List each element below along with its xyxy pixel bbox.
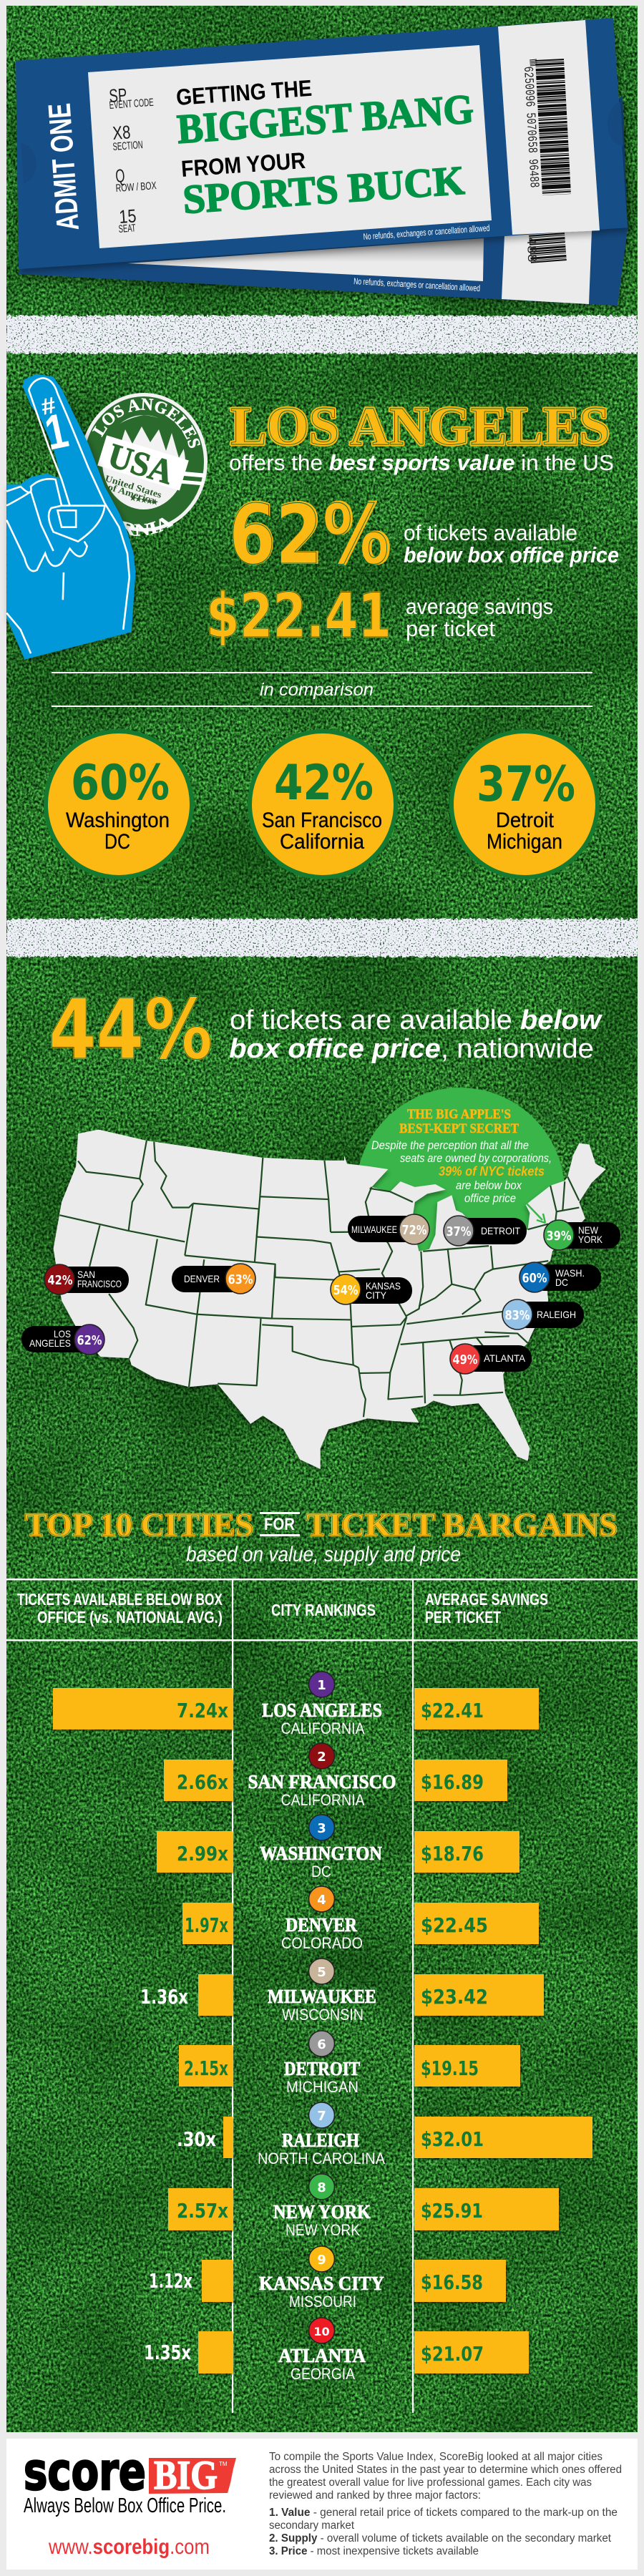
callout: Big Apple text: THE BIG APPLE'S (407, 1107, 511, 1122)
row 3: Washington (157, 1815, 519, 1880)
yard line two (6, 919, 638, 957)
heading: Los Angeles: LOS ANGELES (230, 396, 610, 457)
row 5: Milwaukee: WISCONSIN (282, 2006, 364, 2024)
ticket seat details: SEAT (118, 222, 136, 235)
row 10: Atlanta: GEORGIA (291, 2365, 355, 2383)
row 3: Washington: 2.99x (177, 1842, 228, 1865)
stat text: savings description (406, 594, 553, 641)
map pin: Detroit: 37% (447, 1224, 471, 1239)
callout: Big Apple text: office price (464, 1191, 516, 1205)
callout: Big Apple text (371, 1107, 552, 1205)
row 6: Detroit: 6 (317, 2037, 326, 2052)
barcode: 6250096 5070658 96488 (520, 66, 541, 188)
ticket seat details: Q (114, 165, 125, 187)
map pin: Raleigh (502, 1299, 584, 1330)
map pin: New York: NEW (578, 1224, 599, 1236)
back ticket: No refunds, exchanges or cancellation allowed (353, 276, 480, 293)
US map (54, 1129, 606, 1469)
ticket title: GETTING THE (175, 75, 313, 110)
row 1: Los Angeles: LOS ANGELES (262, 1699, 382, 1721)
stat text: 44 percent description: box office price , nationwide (229, 1034, 594, 1064)
row 7: Raleigh: $32.01 (421, 2127, 484, 2151)
map pin: San Francisco: SAN (77, 1269, 95, 1280)
ticket seat details: ROW / BOX (115, 180, 157, 195)
map pin: Atlanta: 49% (452, 1352, 478, 1367)
map pin: Washington DC: DC (555, 1277, 568, 1288)
row 5: Milwaukee: 5 (317, 1965, 326, 1980)
ticket seat details: EVENT CODE (109, 97, 154, 112)
in comparison label: in comparison (260, 680, 374, 700)
map pin: San Francisco: FRANCISCO (77, 1278, 122, 1289)
map pin: Denver: DENVER (184, 1273, 220, 1284)
map pin: Raleigh: 83% (505, 1308, 530, 1323)
row 8: New York (168, 2174, 559, 2239)
callout: Big Apple text: Despite the perception that all the (371, 1138, 529, 1152)
methodology text (269, 2451, 622, 2557)
map pin: Los Angeles: ANGELES (29, 1337, 71, 1349)
row 7: Raleigh: 7 (317, 2109, 326, 2124)
ScoreBig logo: BIG (154, 2453, 218, 2498)
row 8: New York: 8 (317, 2180, 326, 2195)
row 9: Kansas City: 9 (317, 2253, 326, 2268)
ticket title (175, 75, 475, 223)
heading: Top 10 Cities for Ticket Bargains: TOP 10 CITIES (25, 1506, 253, 1543)
row 4: Denver: $22.45 (421, 1913, 488, 1937)
callout: Big Apple text: seats are owned by corporations, (400, 1151, 552, 1165)
stamp: Los Angeles California (84, 393, 208, 536)
map pin: Denver (172, 1264, 255, 1294)
ticket seat details: SECTION (112, 139, 143, 153)
comparison circle: Washington DC (46, 731, 192, 877)
ticket seat details: X8 (112, 121, 131, 144)
heading: Top 10 Cities for Ticket Bargains (25, 1506, 618, 1543)
comparison circle: San Francisco California: San Francisco (262, 809, 382, 832)
methodology text: the greatest overall value for live professional games. Each city was (269, 2477, 592, 2489)
map pin: Milwaukee (348, 1214, 429, 1244)
map pin: Washington DC: WASH. (555, 1267, 585, 1279)
row 3: Washington: WASHINGTON (260, 1843, 382, 1864)
row 8: New York: NEW YORK (273, 2201, 371, 2223)
row 5: Milwaukee: MILWAUKEE (268, 1986, 376, 2007)
map pin: Atlanta: ATLANTA (484, 1352, 526, 1364)
row 10: Atlanta: 1.35x (144, 2341, 191, 2364)
methodology text: secondary market (269, 2519, 355, 2532)
stat: average savings amount: $22.41 (206, 580, 391, 652)
row 2: San Francisco: 2.66x (177, 1770, 228, 1794)
heading: Los Angeles: LOS ANGELES (230, 396, 610, 457)
comparison circle: Washington DC: DC (104, 830, 130, 854)
footer panel (6, 2439, 638, 2570)
row 9: Kansas City: 1.12x (149, 2269, 192, 2293)
subheading: based on value, supply and price: based on value, supply and price (186, 1543, 461, 1566)
row 4: Denver: COLORADO (281, 1934, 363, 1952)
back ticket (19, 95, 628, 306)
map pin: Detroit: DETROIT (481, 1225, 520, 1236)
map pin: Kansas City (331, 1274, 412, 1304)
number one on finger: # (39, 391, 58, 420)
row 6: Detroit: 2.15x (184, 2057, 228, 2080)
callout: Big Apple text: are below box (456, 1179, 522, 1192)
ScoreBig logo: score (24, 2441, 146, 2502)
comparison circle: Detroit Michigan: Detroit (496, 809, 555, 832)
stat: 62 percent: 62% (229, 487, 389, 582)
heading: Top 10 Cities for Ticket Bargains: TOP 10 CITIES (25, 1506, 253, 1543)
tagline: Always Below Box Office Price. (24, 2494, 226, 2517)
row 7: Raleigh: NORTH CAROLINA (258, 2150, 385, 2167)
number one on finger: 1 (40, 403, 72, 461)
heading: Top 10 Cities for Ticket Bargains: TICKET BARGAINS (306, 1506, 618, 1543)
stamp: Los Angeles California: LOS ANGELES (92, 398, 200, 448)
row 10: Atlanta: 10 (313, 2325, 330, 2338)
comparison circle: San Francisco California: 42% (274, 755, 374, 811)
stat: 44 percent nationwide: 44% (49, 982, 213, 1078)
map pin: Los Angeles (21, 1324, 104, 1355)
map pin: Milwaukee: MILWAUKEE (351, 1224, 397, 1235)
table header: average savings (425, 1590, 548, 1626)
stat text: 44 percent description: of tickets are available below (230, 1005, 603, 1035)
row 9: Kansas City (149, 2246, 506, 2311)
ticket title: SPORTS BUCK (182, 158, 466, 223)
row 9: Kansas City: MISSOURI (289, 2293, 356, 2311)
ticket seat details: SP (108, 84, 127, 107)
row 1: Los Angeles: 1 (317, 1678, 326, 1693)
methodology text: 1. Value - general retail price of tickets compared to the mark-up on the (269, 2507, 618, 2519)
map pin: Atlanta (450, 1344, 532, 1374)
stat text: savings description: average savings (406, 594, 553, 619)
map pin: Washington DC (519, 1262, 601, 1292)
map pin: New York: 39% (547, 1229, 571, 1244)
stat text: 62 percent description: of tickets available (404, 520, 577, 545)
methodology text: across the United States in the past year to determine which ones offered (269, 2464, 622, 2476)
row 5: Milwaukee: $23.42 (421, 1985, 488, 2009)
comparison circle: Washington DC: 60% (71, 755, 170, 811)
stamp: Los Angeles California: USA (104, 436, 178, 492)
table header: tickets available (17, 1590, 223, 1626)
row 1: Los Angeles: $22.41 (421, 1699, 484, 1722)
map pin: Los Angeles: LOS (54, 1328, 71, 1340)
stat text: 62 percent description (404, 520, 619, 567)
comparison circle: San Francisco California: California (280, 830, 364, 854)
row 5: Milwaukee (140, 1958, 544, 2024)
stat text: 62 percent description: below box office price (404, 542, 619, 567)
map pin: New York (544, 1220, 620, 1250)
subheading: best sports value: offers the best sports value in the US (229, 450, 614, 475)
row 6: Detroit: MICHIGAN (286, 2078, 358, 2096)
row 1: Los Angeles: CALIFORNIA (280, 1719, 365, 1737)
row 3: Washington: 3 (317, 1821, 326, 1836)
stamp: Los Angeles California: United States (104, 473, 163, 500)
callout background: Big Apple (356, 1088, 565, 1297)
map pin: Detroit (444, 1216, 527, 1246)
stamp: Los Angeles California: of America (107, 482, 157, 506)
row 6: Detroit (179, 2031, 520, 2096)
row 8: New York: NEW YORK (286, 2221, 360, 2239)
front ticket (16, 18, 628, 269)
map pin: Los Angeles: 62% (77, 1333, 102, 1348)
row 9: Kansas City: KANSAS CITY (259, 2273, 384, 2294)
methodology text: 2. Supply - overall volume of tickets available on the secondary market (269, 2532, 612, 2545)
map pin: New York: YORK (578, 1234, 603, 1245)
table header: city rankings: CITY RANKINGS (271, 1601, 376, 1619)
row 7: Raleigh: .30x (177, 2127, 216, 2151)
ticket fine print: No refunds, exchanges or cancellation allowed (363, 223, 490, 242)
map pin: Denver: 63% (228, 1272, 253, 1287)
stat: 62 percent: 62% (229, 487, 391, 583)
row 10: Atlanta: $21.07 (421, 2342, 484, 2366)
comparison circle: Detroit Michigan (452, 731, 597, 877)
callout: Big Apple text: BEST-KEPT SECRET (399, 1121, 519, 1136)
row 3: Washington: DC (311, 1863, 331, 1880)
callout: Big Apple text: 39% of NYC tickets (439, 1164, 545, 1179)
yard line one (6, 316, 638, 353)
table header: average savings: AVERAGE SAVINGS (425, 1590, 548, 1609)
row 4: Denver: DENVER (286, 1914, 357, 1936)
row 2: San Francisco: CALIFORNIA (280, 1791, 365, 1809)
row 1: Los Angeles (53, 1672, 539, 1737)
comparison circle: San Francisco California (250, 731, 396, 877)
row 4: Denver (182, 1886, 539, 1952)
row 8: New York: 2.57x (177, 2199, 228, 2223)
row 8: New York: $25.91 (421, 2199, 483, 2223)
methodology text: 3. Price - most inexpensive tickets available (269, 2545, 479, 2557)
row 2: San Francisco: SAN FRANCISCO (248, 1771, 396, 1792)
row 2: San Francisco: 2 (317, 1750, 326, 1765)
row 4: Denver: 1.97x (185, 1913, 228, 1937)
row 5: Milwaukee: 1.36x (140, 1985, 188, 2009)
row 10: Atlanta (144, 2318, 529, 2383)
stat text: savings description: per ticket (406, 616, 495, 641)
ticket seat details: 15 (118, 205, 137, 228)
row 9: Kansas City: $16.58 (421, 2270, 483, 2294)
table header: average savings: PER TICKET (425, 1608, 501, 1626)
row 1: Los Angeles: 7.24x (177, 1699, 228, 1722)
stamp: Los Angeles California: ★★★★★ (129, 494, 159, 507)
ScoreBig logo: TM (219, 2461, 228, 2467)
map pin: San Francisco (44, 1264, 129, 1294)
stamp: Los Angeles California: CALIFORNIA (123, 518, 173, 536)
foam finger icon (6, 374, 135, 660)
row 2: San Francisco (164, 1743, 507, 1809)
stat: 44 percent nationwide: 44% (49, 982, 213, 1078)
ticket title: BIGGEST BANG (175, 85, 475, 152)
comparison circle: Detroit Michigan: 37% (477, 756, 575, 813)
row 3: Washington: $18.76 (421, 1842, 484, 1865)
map pin: Kansas City: CITY (366, 1289, 387, 1301)
row 10: Atlanta: ATLANTA (278, 2345, 366, 2366)
table header: tickets available: OFFICE (vs. NATIONAL AVG.) (37, 1608, 223, 1626)
map pin: Kansas City: 54% (333, 1283, 358, 1298)
comparison circle: Washington DC: Washington (66, 809, 170, 832)
comparison circle: Detroit Michigan: Michigan (487, 830, 562, 854)
row 7: Raleigh (177, 2102, 592, 2167)
map pin: Raleigh: RALEIGH (537, 1309, 576, 1320)
tickets illustration (16, 18, 628, 306)
heading: Top 10 Cities for Ticket Bargains: FOR (264, 1515, 295, 1534)
table header: tickets available: TICKETS AVAILABLE BELOW BOX (17, 1590, 223, 1609)
heading: Top 10 Cities for Ticket Bargains: TICKET BARGAINS (306, 1506, 618, 1543)
map pin: Washington DC: 60% (522, 1271, 547, 1286)
row 6: Detroit: $19.15 (421, 2057, 479, 2080)
row 6: Detroit: DETROIT (284, 2058, 360, 2079)
map pin: Milwaukee: 72% (402, 1223, 426, 1238)
row 7: Raleigh: RALEIGH (282, 2129, 359, 2151)
methodology text: To compile the Sports Value Index, ScoreBig looked at all major cities (269, 2451, 602, 2463)
ticket seat details (108, 84, 157, 235)
stat: average savings amount: $22.41 (206, 580, 391, 652)
row 2: San Francisco: $16.89 (421, 1770, 484, 1794)
admit one label: ADMIT ONE (42, 102, 86, 232)
map pin: Kansas City: KANSAS (366, 1280, 401, 1292)
map pin: San Francisco: 42% (47, 1273, 73, 1288)
arrow: callout to New York (527, 1204, 545, 1223)
methodology text: reviewed and ranked by three major factors: (269, 2489, 481, 2502)
row 4: Denver: 4 (317, 1893, 326, 1908)
barcode (520, 59, 557, 195)
back ticket: 488 (523, 237, 538, 263)
website: www.scorebig.com (48, 2535, 210, 2559)
ticket title: FROM YOUR (180, 147, 306, 182)
stat text: 44 percent description (229, 1005, 603, 1064)
